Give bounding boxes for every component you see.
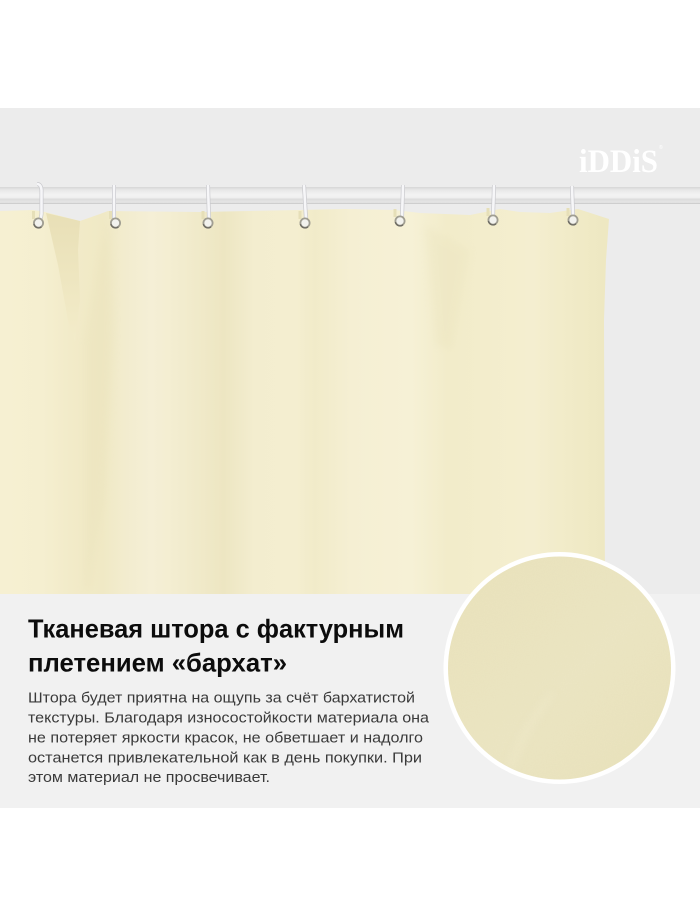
- curtain fabric: [0, 209, 609, 594]
- body text: текстуры. Благодаря износостойкости материала она: [28, 710, 430, 726]
- body text: этом материал не просвечивает.: [28, 769, 270, 786]
- fabric texture close-up circle: [444, 552, 676, 784]
- body text: не потеряет яркости красок, не обветшает и надолго: [28, 730, 423, 746]
- heading: [28, 614, 404, 678]
- curtain fold shadow: [46, 213, 80, 342]
- shower curtain hooks and grommets: [34, 184, 578, 228]
- brand logo: ®: [659, 144, 663, 151]
- text panel background: [0, 594, 700, 808]
- body text: останется привлекательной как в день покупки. При: [28, 750, 422, 766]
- body text: [28, 690, 430, 786]
- heading: плетением «бархат»: [28, 648, 287, 678]
- curtain rod: [0, 187, 700, 204]
- background panel: upper gray: [0, 108, 700, 594]
- body text: Штора будет приятна на ощупь за счёт бархатистой: [28, 690, 415, 706]
- heading: Тканевая штора с фактурным: [28, 614, 404, 644]
- brand logo: iDDiS: [579, 144, 658, 180]
